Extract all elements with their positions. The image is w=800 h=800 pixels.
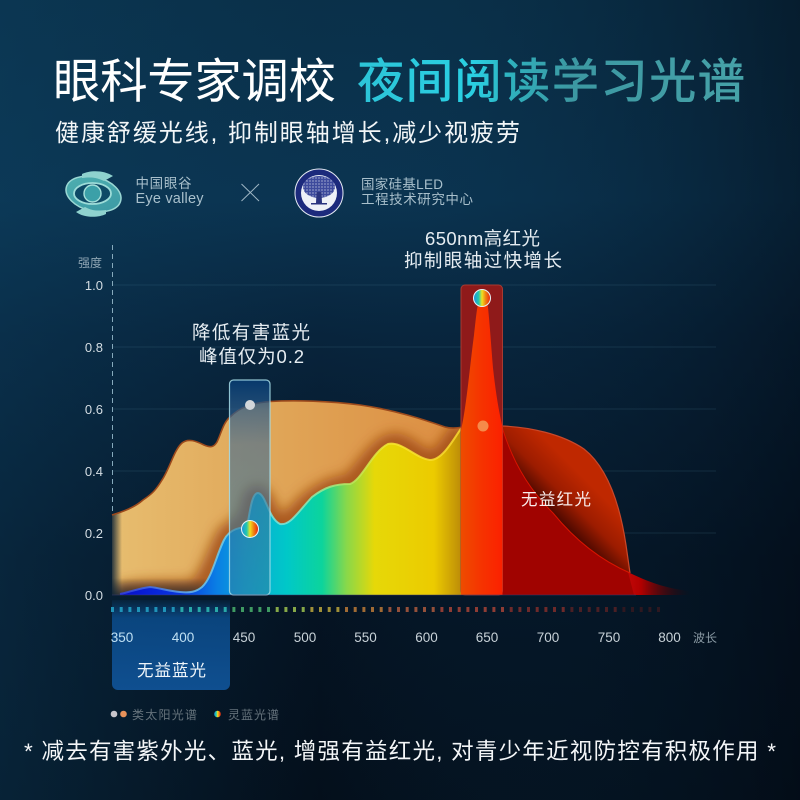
legend: lingblue spectrum: 灵蓝光谱 — [228, 708, 279, 722]
data points — [242, 290, 490, 538]
x axis labels: 400 — [172, 630, 194, 645]
x axis labels: 800 — [658, 630, 681, 645]
legend — [111, 707, 279, 722]
callout: reduced blue peak — [192, 322, 310, 367]
y axis: 0.0 — [85, 588, 103, 603]
icon: university seal — [295, 169, 343, 217]
y axis: 0.4 — [85, 464, 103, 479]
text: center name — [361, 176, 474, 207]
text: Eye valley name: 中国眼谷 — [136, 176, 192, 191]
box: useless blue light — [112, 600, 230, 690]
label: useless red light: 无益红光 — [521, 490, 591, 509]
shading above the spectrum — [112, 428, 462, 595]
x axis labels: 600 — [415, 630, 438, 645]
blue band highlight — [230, 380, 270, 595]
text: Eye valley name: Eye valley — [136, 191, 204, 207]
chart: spectrum — [78, 228, 716, 603]
x axis labels: 350 — [111, 630, 133, 645]
logo: Eye valley — [62, 171, 204, 217]
callout: 650nm red light: 650nm高红光 — [425, 228, 540, 249]
box: useless blue light: 无益蓝光 — [137, 661, 206, 680]
logo: LED research center — [295, 169, 474, 217]
icon: cross mark — [242, 184, 259, 201]
title — [53, 56, 745, 109]
x axis labels: 650 — [476, 630, 498, 645]
text: center name: 工程技术研究中心 — [361, 192, 474, 207]
y axis: 强度 — [78, 255, 102, 270]
x axis labels: 450 — [233, 630, 255, 645]
sun-like spectrum area — [112, 401, 463, 595]
y axis: 0.6 — [85, 402, 103, 417]
legend: sun-like spectrum: 类太阳光谱 — [132, 707, 197, 722]
text: center name: 国家硅基LED — [361, 176, 443, 192]
y axis — [78, 245, 112, 603]
subtitle: 健康舒缓光线, 抑制眼轴增长,减少视疲劳 — [55, 120, 520, 147]
useless red region — [502, 426, 700, 595]
red band highlight — [461, 285, 502, 595]
x axis labels: 波长 — [693, 631, 717, 645]
callout: 650nm red light: 抑制眼轴过快增长 — [404, 250, 562, 271]
y axis: 1.0 — [85, 278, 103, 293]
x axis labels: 500 — [294, 630, 316, 645]
text: Eye valley name — [136, 176, 204, 207]
x axis labels: 750 — [598, 630, 620, 645]
wavelength colour scale — [111, 607, 660, 612]
callout: reduced blue peak: 峰值仅为0.2 — [199, 346, 304, 367]
lingblue spectrum area — [120, 427, 462, 595]
x axis labels: 700 — [537, 630, 559, 645]
x axis labels: 550 — [354, 630, 377, 645]
title: 眼科专家调校 — [53, 56, 336, 109]
icon: eye with hands — [62, 171, 125, 217]
y axis: 0.8 — [85, 340, 103, 355]
baseline — [112, 594, 636, 596]
footer statement: * 减去有害紫外光、蓝光, 增强有益红光, 对青少年近视防控有积极作用 * — [24, 739, 776, 764]
grid lines — [112, 285, 716, 533]
title: 夜间阅读学习光谱 — [357, 56, 745, 109]
callout: reduced blue peak: 降低有害蓝光 — [192, 322, 310, 343]
y axis: 0.2 — [85, 526, 103, 541]
callout: 650nm red light — [404, 228, 562, 271]
x axis labels — [111, 630, 717, 645]
